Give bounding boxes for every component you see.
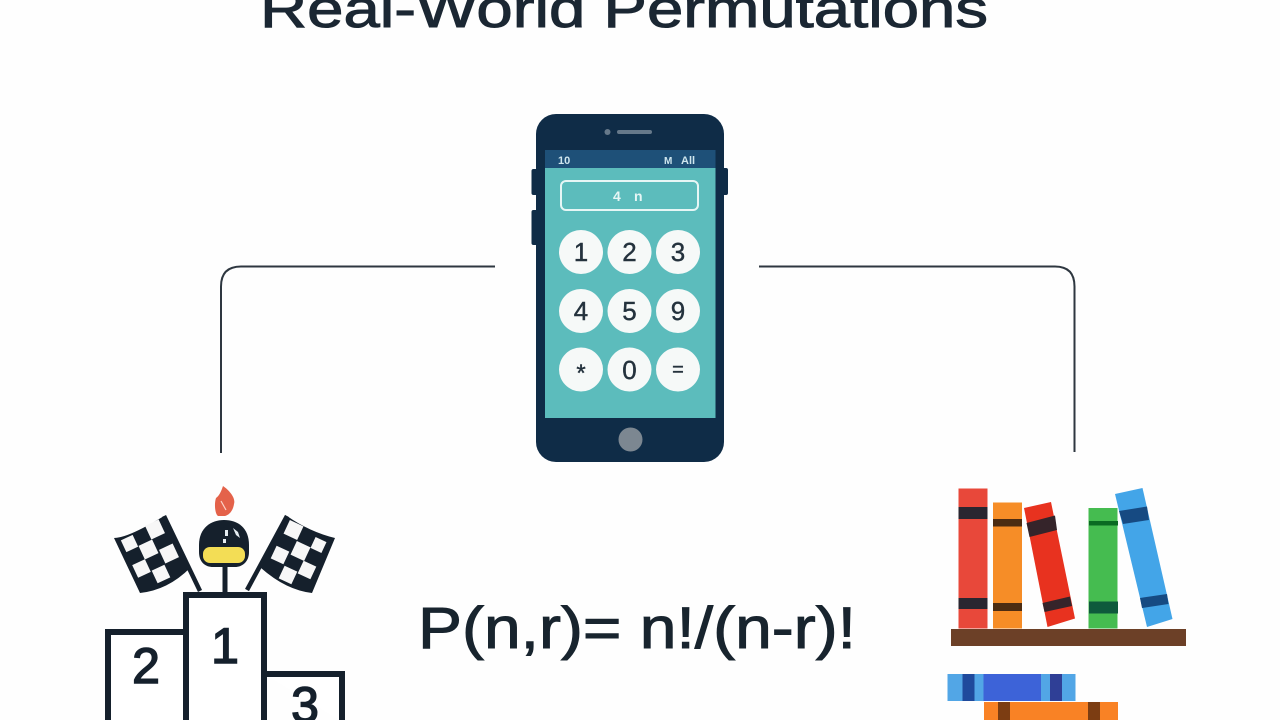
status bar: All: [681, 155, 695, 167]
phone body: [536, 114, 724, 462]
input field: [561, 181, 698, 210]
input field: 4: [613, 188, 621, 204]
podium numbers: 1: [211, 618, 239, 674]
keypad: 1: [574, 237, 588, 267]
icon: smartphone with keypad: [532, 114, 728, 462]
leaning blue book: [1115, 488, 1172, 627]
left checkered flag: [114, 516, 200, 593]
icon: racing podium with flags: [108, 486, 342, 720]
camera and speaker: [604, 129, 652, 135]
icon: books on a shelf: [948, 488, 1186, 720]
status bar: M: [664, 156, 672, 167]
keypad: 3: [671, 237, 685, 267]
screen: [545, 150, 716, 418]
formula: P(n,r)= n!/(n-r)!: [418, 596, 856, 661]
home button: [618, 428, 642, 452]
podium blocks: [108, 595, 342, 720]
right checkered flag: [247, 516, 335, 593]
stacked orange book: [984, 702, 1118, 720]
stacked blue book: [948, 674, 1076, 701]
keypad: *: [576, 360, 586, 387]
keypad: 9: [671, 296, 685, 326]
flame: [215, 486, 234, 516]
input field: n: [634, 188, 643, 204]
keypad: 4: [574, 296, 588, 326]
keypad: [559, 230, 700, 392]
keypad: 2: [622, 237, 637, 267]
status bar: [545, 150, 716, 168]
status bar: 10: [558, 155, 570, 167]
podium numbers: [132, 618, 319, 720]
right connector line: [759, 266, 1074, 452]
helmet on stem: [199, 520, 249, 593]
keypad: 0: [622, 355, 637, 385]
keypad: 5: [622, 296, 637, 326]
left connector line: [221, 266, 495, 453]
red book: [958, 488, 988, 628]
green book: [1088, 508, 1118, 628]
leaning red book: [1024, 502, 1075, 627]
side buttons: [532, 168, 728, 245]
orange book: [993, 502, 1022, 628]
podium numbers: 2: [132, 638, 160, 694]
wooden shelf: [951, 629, 1186, 646]
keypad: =: [672, 359, 684, 381]
